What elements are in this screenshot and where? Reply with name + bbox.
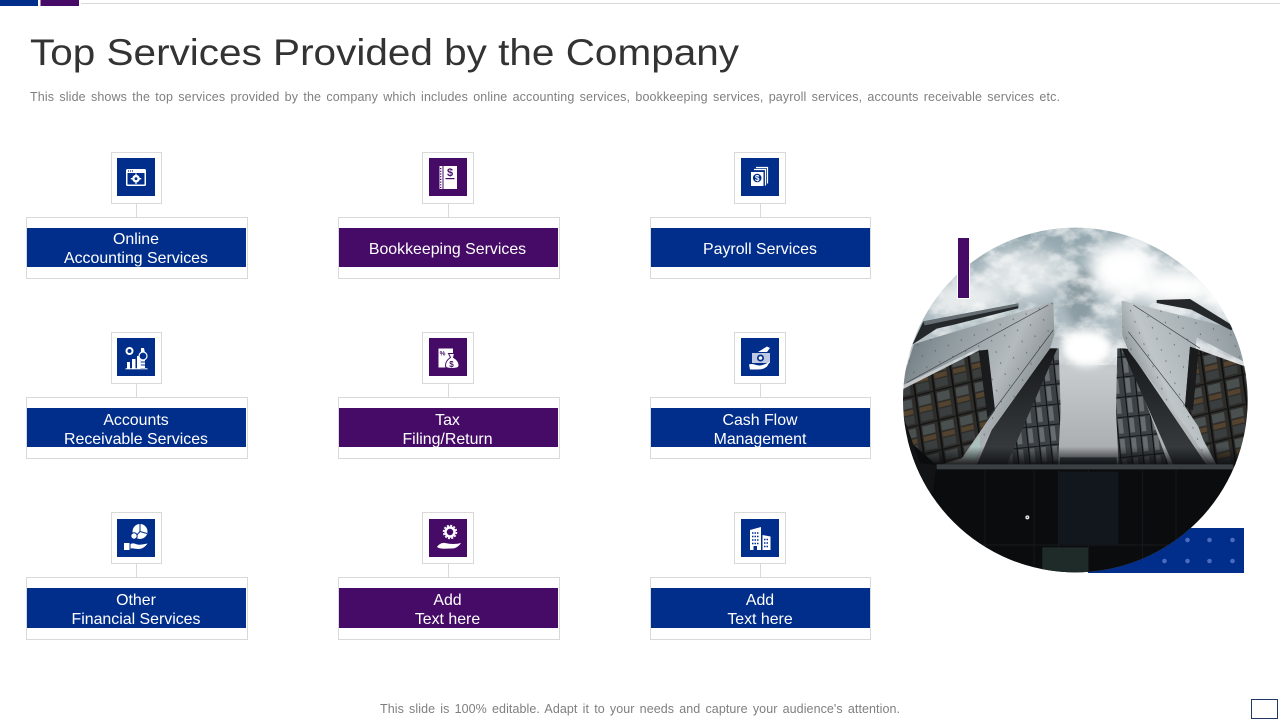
- service card: Online Accounting Services: Online: [113, 231, 159, 248]
- purple accent bar on photo: [958, 238, 970, 298]
- service card: Bookkeeping Services: [338, 152, 560, 278]
- service card: Add Text here (blue): Text here: [727, 611, 793, 628]
- top accent bars: [0, 0, 1280, 6]
- icon: office buildings: [750, 527, 770, 550]
- title: Top Services Provided by the Company: [30, 32, 740, 73]
- service card: Tax Filing/Return: [338, 332, 560, 458]
- left tower: [1007, 348, 1061, 465]
- service card: Add Text here (blue): Add: [746, 592, 774, 609]
- dotted blue rectangle behind photo: [1088, 528, 1244, 573]
- service card: Cash Flow Management: Cash Flow: [722, 412, 798, 429]
- service card: Payroll Services: [650, 152, 870, 278]
- service card: Accounts Receivable Services: Accounts: [103, 412, 169, 429]
- service card: Cash Flow Management: Management: [714, 431, 807, 448]
- icon: pie chart over hand: [124, 524, 148, 550]
- service card: Add Text here (purple): Add: [433, 592, 462, 609]
- service card: Other Financial Services: Financial Services: [72, 611, 201, 628]
- service card: Payroll Services: Payroll Services: [703, 241, 817, 258]
- icon: payroll sheets: $: [755, 174, 760, 183]
- service card: Add Text here (blue): [650, 512, 870, 640]
- service card: Accounts Receivable Services: [26, 332, 248, 458]
- icon: tax document and money bag: %: [440, 350, 446, 358]
- service card: Add Text here (purple): [338, 512, 560, 640]
- service card: Bookkeeping Services: Bookkeeping Services: [369, 241, 526, 258]
- service card: Add Text here (purple): Text here: [415, 611, 480, 628]
- corner outline box: [1252, 700, 1278, 718]
- service card: Cash Flow Management: [650, 332, 870, 458]
- service card: Other Financial Services: Other: [116, 592, 157, 609]
- photo: skyscrapers in a circle: [900, 225, 1257, 578]
- icon: payroll sheets: [751, 168, 768, 186]
- service card: Accounts Receivable Services: Receivable Services: [64, 431, 208, 448]
- icon: tax document and money bag: [438, 348, 459, 369]
- service card: Online Accounting Services: Accounting Services: [64, 250, 208, 267]
- icon: notebook: $: [447, 167, 453, 179]
- footer note: This slide is 100% editable. Adapt it to your needs and capture your audience's attention.: [380, 702, 900, 716]
- subtitle: This slide shows the top services provided by the company which includes online accounting services, bookkeeping services, payroll services, accounts receivable services etc.: [30, 90, 1060, 104]
- center structure and base: [1060, 457, 1117, 466]
- service card: Other Financial Services: [26, 512, 248, 640]
- icon: chart and gears: [126, 348, 148, 369]
- icon: tax document and money bag: $: [449, 360, 454, 369]
- icon: hands exchanging cash: [749, 346, 770, 370]
- icon: notebook: [440, 166, 457, 189]
- icon: gear over hand: [437, 526, 461, 549]
- service card: Tax Filing/Return: Tax: [435, 412, 460, 429]
- service card: Online Accounting Services: [26, 152, 248, 278]
- icon: browser gear: [126, 169, 146, 186]
- right tower: [1116, 348, 1169, 465]
- service card: Tax Filing/Return: Filing/Return: [402, 431, 493, 448]
